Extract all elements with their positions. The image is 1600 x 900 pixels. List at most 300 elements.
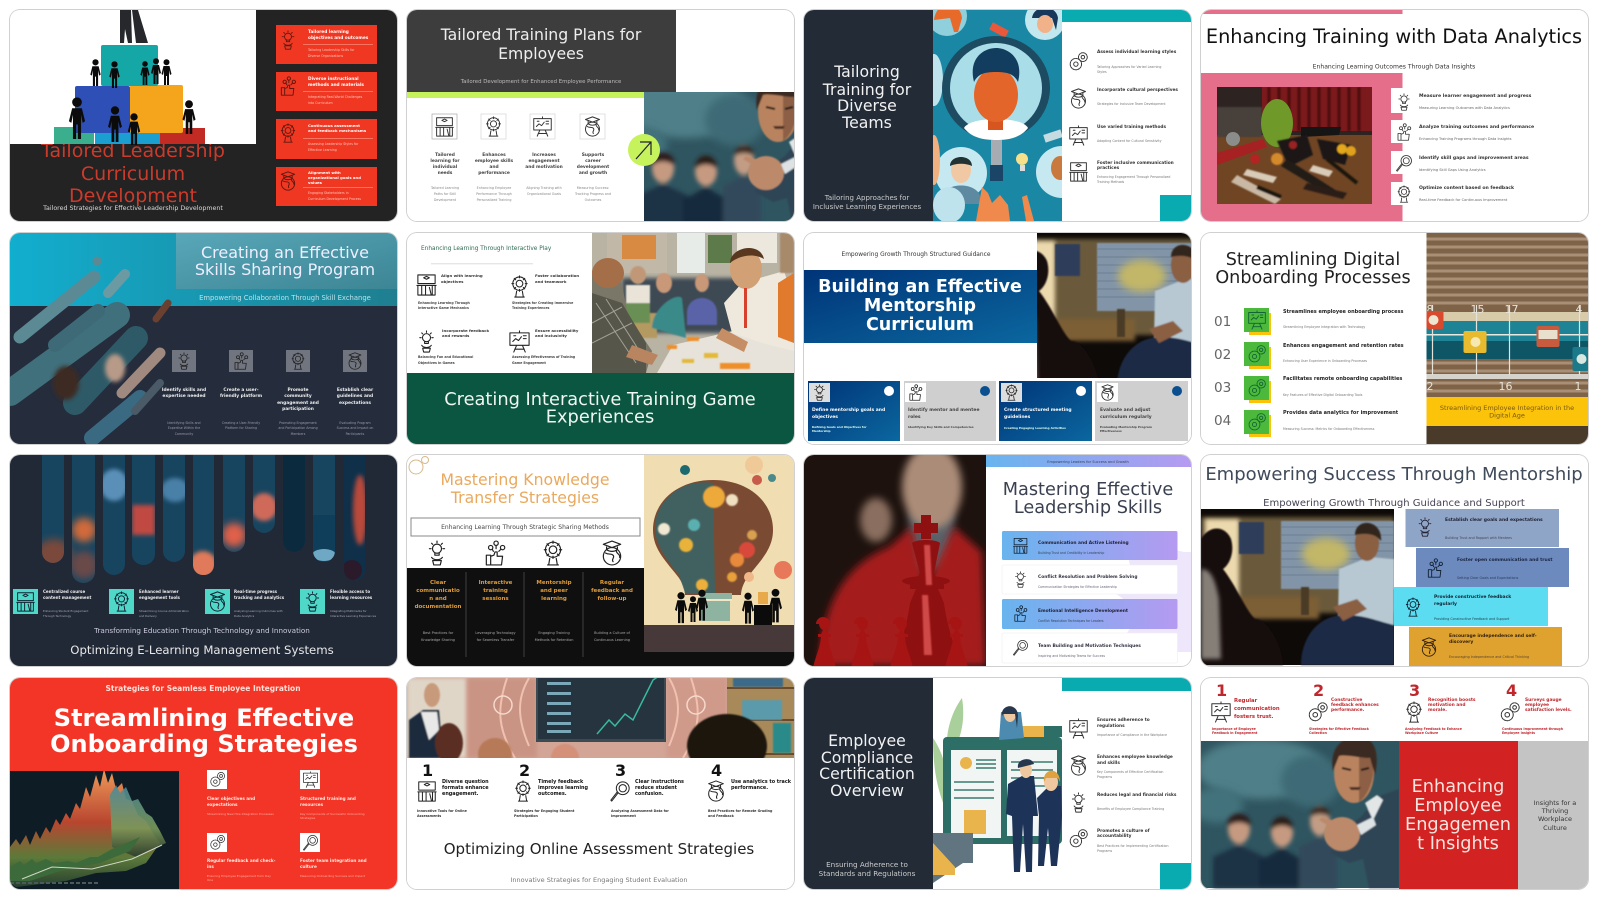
item 4: culture bbox=[300, 864, 317, 868]
item 3 bbox=[1070, 124, 1166, 145]
column 2: Participation bbox=[514, 814, 539, 818]
callout 2: into Curriculum bbox=[308, 101, 333, 105]
header band: Skills Sharing Program bbox=[195, 260, 375, 278]
item 3: tracking and analytics bbox=[234, 595, 285, 600]
insight 3: Workplace Culture bbox=[1405, 730, 1438, 734]
item 2: and Delivery bbox=[139, 614, 157, 618]
column headings: Clear bbox=[430, 580, 446, 586]
title bbox=[440, 470, 610, 507]
panel: Mastering Effective Leadership Skills bbox=[804, 455, 1191, 666]
item 4: Best Practices for Implementing Certification bbox=[1097, 844, 1169, 848]
item 3: Conflict Resolution Techniques for Leaders bbox=[1038, 619, 1104, 623]
title block: t Insights bbox=[1417, 834, 1499, 854]
step 1: Establish clear goals and expectations bbox=[1445, 517, 1543, 523]
panel: Enhancing Employee Engagement Insights bbox=[1201, 678, 1588, 888]
insight 1: communication bbox=[1234, 706, 1280, 712]
column headings: feedback and bbox=[591, 588, 633, 594]
item 3: Data Analytics bbox=[234, 614, 255, 618]
sidebar with title: Overview bbox=[830, 780, 904, 800]
accent bars bbox=[1201, 10, 1402, 221]
column 1: Tailored Learning bbox=[430, 186, 459, 190]
column 2: Enhances bbox=[482, 152, 506, 158]
title banner bbox=[407, 10, 676, 92]
title: Optimizing E-Learning Management Systems bbox=[70, 643, 334, 657]
column 1 bbox=[430, 114, 460, 202]
column 1: needs bbox=[438, 170, 453, 176]
callout 2: methods and materials bbox=[308, 82, 364, 88]
insight 3: 3 bbox=[1409, 680, 1420, 700]
item 1: Importance of Compliance in the Workplace bbox=[1097, 732, 1167, 736]
column headings: n and bbox=[429, 596, 447, 602]
icon row bbox=[429, 541, 621, 565]
sidebar with title: Ensuring Adherence to bbox=[826, 860, 908, 868]
step 03: Facilitates remote onboarding capabilities bbox=[1283, 376, 1402, 382]
item 2 bbox=[1072, 754, 1173, 778]
item 3 bbox=[1391, 151, 1529, 174]
item 4: Promotes a culture of bbox=[1097, 828, 1150, 834]
title block: Enhancing bbox=[1412, 776, 1504, 796]
decorative bubbles bbox=[409, 456, 428, 474]
column headings: Regular bbox=[600, 580, 624, 586]
step 2 bbox=[1416, 548, 1569, 587]
title band: Mentorship bbox=[864, 296, 976, 316]
photo: timeline board: 15 bbox=[1470, 302, 1484, 316]
column 2: Platform for Sharing bbox=[225, 426, 257, 430]
illustration: magnifier over diverse faces bbox=[933, 10, 1062, 221]
column 2: performance bbox=[478, 170, 510, 176]
card 1 bbox=[808, 380, 900, 440]
step 04: 04 bbox=[1214, 412, 1231, 428]
insight 1: Feedback in Engagement bbox=[1212, 730, 1258, 734]
item 1: Ensures adherence to bbox=[1097, 716, 1150, 722]
column 2: Creating a User-Friendly bbox=[222, 420, 260, 424]
photo: classroom with analytics screen bbox=[407, 678, 794, 758]
callout 1: Tailored learning bbox=[308, 29, 349, 35]
item 2 bbox=[300, 770, 365, 820]
column headings: Interactive bbox=[479, 580, 513, 586]
column 1: expertise needed bbox=[162, 392, 206, 398]
item 3 bbox=[1002, 599, 1178, 629]
item 2: Strategies for Creating Immersive bbox=[512, 300, 573, 304]
top strip bbox=[986, 455, 1191, 467]
step 2: Setting Clear Goals and Expectations bbox=[1457, 576, 1519, 580]
card 1: objectives bbox=[812, 414, 838, 420]
item 4 bbox=[1070, 160, 1174, 184]
step 3: regularly bbox=[1434, 601, 1457, 607]
item 1: regulations bbox=[1097, 722, 1125, 728]
item 3: Incorporate feedback bbox=[442, 328, 489, 332]
column 2: 2 bbox=[519, 760, 530, 780]
decorative lavender shape bbox=[1111, 538, 1191, 652]
item 1: Enhancing Learning Through bbox=[418, 300, 470, 304]
item 2: and skills bbox=[1097, 760, 1120, 766]
title: Leadership Skills bbox=[1014, 498, 1162, 518]
insight 4 bbox=[1501, 680, 1572, 734]
item 3: Objectives in Games bbox=[418, 360, 455, 364]
subtitle: Enhancing Learning Through Interactive Play bbox=[421, 246, 552, 252]
item 1: Measure learner engagement and progress bbox=[1419, 93, 1532, 99]
item 2: Strategies bbox=[300, 816, 316, 820]
card 2: Identify mentor and mentee bbox=[908, 406, 980, 412]
item 2 bbox=[109, 589, 189, 618]
column 2: Create a user- bbox=[223, 386, 259, 392]
item 1: Clear objectives and bbox=[207, 796, 255, 800]
sidebar with title: Diverse bbox=[837, 96, 897, 115]
title: Mastering Effective bbox=[1003, 480, 1173, 500]
title banner: Tailored Training Plans for bbox=[440, 25, 642, 44]
column 3: Clear instructions bbox=[635, 778, 684, 784]
card 1: Define mentorship goals and bbox=[812, 406, 885, 412]
sidebar with title: Compliance bbox=[821, 748, 913, 766]
title band: Experiences bbox=[546, 406, 654, 427]
column notes bbox=[421, 631, 631, 642]
item 2: Programs bbox=[1097, 774, 1112, 778]
card 4: Evaluating Mentorship Program bbox=[1100, 424, 1152, 428]
black panel bbox=[407, 568, 794, 666]
photo: timeline board: 8 bbox=[1426, 302, 1434, 316]
item 4: Training Methods bbox=[1096, 180, 1125, 184]
column 3: and Participation Among bbox=[278, 426, 318, 430]
photo: timeline board: 4 bbox=[1576, 302, 1582, 316]
step 01: Streamlining Employee Integration with Technology bbox=[1283, 324, 1365, 328]
photo: timeline board bbox=[1426, 233, 1588, 444]
callout 4: values bbox=[308, 180, 323, 185]
column notes: Building a Culture of bbox=[594, 631, 631, 635]
card 4 bbox=[1095, 380, 1188, 440]
item 4: Flexible access to bbox=[330, 589, 370, 594]
title: Onboarding Processes bbox=[1215, 268, 1411, 288]
item 4: practices bbox=[1097, 165, 1120, 171]
item 3: Ensuring Employee Engagement from Day bbox=[207, 874, 271, 878]
item 4: and inclusivity bbox=[535, 332, 567, 338]
insight 4: Surveys gauge bbox=[1525, 696, 1562, 702]
column 1: individual bbox=[433, 164, 458, 170]
sidebar with title: Inclusive Learning Experiences bbox=[813, 203, 921, 211]
item 2: resources bbox=[300, 802, 324, 806]
item 4: Foster inclusive communication bbox=[1097, 160, 1174, 166]
step 4: Encourage independence and self- bbox=[1449, 633, 1537, 639]
insight 2: Collection bbox=[1309, 730, 1328, 734]
column 3: Aligning Training with bbox=[526, 186, 562, 190]
column 4 bbox=[708, 760, 792, 818]
column 4: Evaluating Program bbox=[339, 420, 371, 424]
photo: manager pointing bbox=[1201, 741, 1399, 889]
column 2: employee skills bbox=[475, 158, 513, 164]
image: data mountain landscape bbox=[10, 771, 179, 889]
column 2: and bbox=[489, 164, 499, 170]
title: Onboarding Strategies bbox=[50, 730, 358, 758]
column 1: Development bbox=[434, 198, 457, 202]
item 1: Assess individual learning styles bbox=[1097, 49, 1177, 55]
item 2 bbox=[1391, 120, 1534, 143]
column 4 bbox=[337, 350, 374, 436]
column 3: 3 bbox=[615, 760, 626, 780]
column 4: Best Practices for Remote Grading bbox=[708, 808, 773, 812]
column headings: training bbox=[483, 588, 508, 594]
column 4: Establish clear bbox=[337, 386, 374, 392]
column 3: confusion. bbox=[635, 790, 664, 796]
insight 3 bbox=[1405, 680, 1476, 734]
item 3: Emotional Intelligence Development bbox=[1038, 608, 1128, 614]
card 4: curriculum regularly bbox=[1100, 414, 1152, 420]
column 4: guidelines and bbox=[337, 392, 373, 398]
item 2: Structured training and bbox=[300, 796, 356, 800]
card 2: roles bbox=[908, 414, 921, 420]
subtitle: Innovative Strategies for Engaging Student Evaluation bbox=[510, 876, 688, 884]
column 2: friendly platform bbox=[220, 392, 262, 398]
illustration: compliance dashboard and staff bbox=[933, 698, 1062, 883]
item 1: Tailoring Approaches for Varied Learning bbox=[1096, 65, 1161, 69]
item 3: and rewards bbox=[442, 332, 470, 338]
title: Optimizing Online Assessment Strategies bbox=[444, 840, 754, 858]
column 1 bbox=[162, 350, 206, 436]
column 3 bbox=[611, 760, 684, 818]
tagline block: Culture bbox=[1543, 824, 1567, 832]
sidebar with title: Tailoring Approaches for bbox=[824, 194, 909, 202]
callout 3: Effective Learning bbox=[308, 148, 337, 152]
card 1: Defining Goals and Objectives for bbox=[812, 424, 867, 428]
photo: manager pointing bbox=[644, 92, 794, 221]
title banner: Employees bbox=[498, 44, 584, 63]
caption box bbox=[1426, 396, 1588, 426]
insight 4: 4 bbox=[1506, 680, 1517, 700]
item 1: Centralized course bbox=[43, 589, 85, 594]
subtitle box bbox=[411, 518, 640, 536]
panel: Optimizing Online Assessment Strategies bbox=[407, 678, 794, 888]
item 4: Real-time Feedback for Continuous Improvement bbox=[1419, 198, 1508, 202]
column 4: Participants bbox=[346, 432, 365, 436]
item 4: Integrating Multimedia for bbox=[330, 609, 367, 613]
title: Streamlining Digital bbox=[1226, 250, 1400, 270]
insight 1: fosters trust. bbox=[1234, 714, 1273, 720]
item 4 bbox=[510, 328, 579, 364]
item 4 bbox=[1391, 182, 1515, 205]
column 4 bbox=[574, 114, 611, 202]
title block: Engagemen bbox=[1405, 814, 1511, 834]
column notes: Best Practices for bbox=[423, 631, 454, 635]
item 4: Optimize content based on feedback bbox=[1419, 185, 1515, 191]
step 3: Provide constructive feedback bbox=[1434, 594, 1512, 600]
item 4 bbox=[300, 832, 367, 878]
photo: training tools on a floor bbox=[1217, 87, 1372, 204]
panel: Mastering Knowledge Transfer Strategies bbox=[407, 455, 794, 666]
item 2: Conflict Resolution and Problem Solving bbox=[1038, 574, 1137, 580]
column 3: engagement bbox=[528, 158, 560, 164]
sidebar with title: Employee bbox=[828, 730, 906, 750]
item 1 bbox=[13, 589, 91, 618]
item 4: learning resources bbox=[330, 595, 373, 600]
column 2: Enhancing Employee bbox=[477, 186, 511, 190]
title band: Curriculum bbox=[866, 314, 974, 334]
column notes: Continuous Learning bbox=[594, 638, 630, 642]
callout 2 bbox=[276, 72, 377, 111]
column 2: Performance Through bbox=[476, 192, 512, 196]
header band bbox=[10, 232, 397, 306]
item 2 bbox=[1002, 565, 1178, 594]
item 2: Communication Strategies for Effective Leadership bbox=[1038, 585, 1117, 589]
title block bbox=[1399, 740, 1518, 888]
panel: Tailoring Training for Diverse Teams bbox=[804, 10, 1191, 221]
item 4: Enhancing Engagement Through Personalized bbox=[1097, 175, 1170, 179]
callout 1: Tailoring Leadership Skills for bbox=[307, 48, 355, 52]
photo: teams playing a training game bbox=[592, 233, 794, 373]
column 3 bbox=[277, 350, 319, 436]
card 3: guidelines bbox=[1004, 414, 1031, 420]
illustration: pyramid of blocks with people bbox=[10, 10, 256, 145]
callout 3: and feedback mechanisms bbox=[308, 128, 367, 133]
step 04: Provides data analytics for improvement bbox=[1283, 410, 1399, 416]
title band bbox=[804, 270, 1037, 342]
panel: Building an Effective Mentorship Curriculum bbox=[804, 232, 1191, 444]
column 3: participation bbox=[282, 406, 314, 412]
title bbox=[50, 704, 358, 758]
insight 2: 2 bbox=[1313, 680, 1324, 700]
column 4: career bbox=[585, 158, 602, 164]
item 4: Foster team integration and bbox=[300, 858, 367, 862]
step 1 bbox=[1406, 509, 1559, 547]
card 4: Effectiveness bbox=[1100, 428, 1122, 432]
panel: Tailored Leadership Curriculum Development bbox=[10, 10, 397, 221]
item 3: Use varied training methods bbox=[1097, 124, 1166, 130]
column 4: Outcomes bbox=[585, 198, 602, 202]
column 1: 1 bbox=[422, 760, 433, 780]
photo: timeline board: 1 bbox=[1574, 380, 1582, 392]
column notes: Leveraging Technology bbox=[475, 631, 516, 635]
step 4: Encouraging Independence and Critical Thinking bbox=[1449, 655, 1529, 659]
sidebar with title bbox=[804, 10, 933, 221]
illustration: idea light bulb bbox=[644, 455, 794, 652]
callout 1: objectives and outcomes bbox=[308, 35, 369, 41]
column 4: Supports bbox=[582, 152, 605, 158]
panel: Empowering Success Through Mentorship bbox=[1201, 455, 1588, 666]
insight 2: Strategies for Effective Feedback bbox=[1309, 726, 1370, 730]
panel: Streamlining Effective Onboarding Strategies bbox=[10, 678, 397, 888]
item 1 bbox=[1070, 716, 1167, 738]
item 1: content management bbox=[43, 595, 91, 600]
panel: Streamlining Digital Onboarding Processes bbox=[1201, 232, 1588, 444]
step 02: Enhances engagement and retention rates bbox=[1283, 342, 1404, 348]
step 3: Providing Constructive Feedback and Support bbox=[1434, 617, 1510, 621]
column 3: Promote bbox=[287, 386, 309, 392]
callout 3: Assessing Leadership Styles for bbox=[308, 142, 359, 146]
item 2: Key Components of Effective Certification bbox=[1097, 770, 1163, 774]
column headings: learning bbox=[541, 596, 567, 602]
item 3 bbox=[205, 589, 285, 618]
item 4: Game Engagement bbox=[512, 360, 546, 364]
subtitle box: Enhancing Learning Through Strategic Sharing Methods bbox=[441, 524, 609, 531]
item 3: Real-time progress bbox=[234, 589, 278, 594]
column 4: Success and Impact on bbox=[337, 426, 373, 430]
subtitle: Enhancing Learning Outcomes Through Data Insights bbox=[1313, 64, 1475, 70]
column 1: Identify skills and bbox=[162, 386, 206, 392]
callout 3 bbox=[276, 119, 377, 159]
column 1: Paths for Skill bbox=[434, 192, 456, 196]
item 1: Measuring Learning Outcomes with Data Analytics bbox=[1419, 106, 1510, 110]
column 2 bbox=[514, 760, 589, 818]
panel: Employee Compliance Certification Overview bbox=[804, 678, 1191, 888]
tagline block: Insights for a bbox=[1534, 798, 1576, 806]
card 4: Evaluate and adjust bbox=[1100, 406, 1151, 412]
insight 4: Continuous Improvement through bbox=[1502, 726, 1564, 730]
insight 1: Importance of Employee bbox=[1212, 726, 1256, 730]
column 2: Timely feedback bbox=[538, 778, 584, 784]
step 02: 02 bbox=[1214, 346, 1231, 362]
photo: chess king before a leader bbox=[804, 455, 986, 666]
insight 1 bbox=[1212, 680, 1280, 734]
sidebar with title: Certification bbox=[819, 764, 915, 782]
item 1: Through Technology bbox=[42, 614, 72, 618]
item 4 bbox=[300, 589, 377, 618]
item 1 bbox=[1002, 531, 1178, 560]
column 1: Innovative Tools for Online bbox=[417, 808, 468, 812]
insight 1: Regular bbox=[1234, 698, 1258, 704]
column 3: Members bbox=[291, 432, 306, 436]
callout 2: Integrating Real-World Challenges bbox=[308, 95, 363, 99]
callout 1: Diverse Organizations bbox=[308, 54, 344, 58]
panel: Creating Interactive Training Game Experiences bbox=[407, 232, 794, 444]
item 1: objectives bbox=[441, 278, 464, 284]
callout 4 bbox=[276, 167, 377, 206]
item 2: Foster collaboration bbox=[535, 272, 579, 278]
item 3: Reduces legal and financial risks bbox=[1097, 792, 1177, 798]
column 4: performance. bbox=[731, 784, 768, 790]
panel: Creating an Effective Skills Sharing Program bbox=[10, 232, 397, 444]
slide title: Curriculum bbox=[81, 163, 185, 185]
callout 4: Curriculum Development Process bbox=[308, 197, 361, 201]
column headings: documentation bbox=[415, 604, 461, 610]
step 01: 01 bbox=[1214, 314, 1231, 330]
tagline block bbox=[1518, 740, 1588, 888]
insight 1: 1 bbox=[1216, 680, 1227, 700]
item 4: Inspiring and Motivating Teams for Success bbox=[1038, 654, 1105, 658]
card 2 bbox=[904, 380, 996, 440]
photo: diagonal strips of people bbox=[10, 260, 168, 438]
item 1: Interactive Game Mechanics bbox=[418, 306, 469, 310]
header band: Empowering Collaboration Through Skill Exchange bbox=[199, 294, 371, 302]
item 3: Analyzing Learning Outcomes with bbox=[234, 609, 283, 613]
column 2 bbox=[220, 350, 262, 430]
column 2: improves learning bbox=[538, 784, 589, 790]
slide title: Development bbox=[69, 185, 197, 207]
insight 4: satisfaction levels. bbox=[1525, 706, 1572, 712]
accent blocks bbox=[1062, 678, 1191, 888]
step 02 bbox=[1214, 342, 1404, 368]
card 3: Creating Engaging Learning Activities bbox=[1004, 426, 1066, 430]
item 2: Enhanced learner bbox=[139, 589, 179, 594]
item 1 bbox=[417, 272, 483, 310]
insight 2: performance. bbox=[1331, 706, 1365, 712]
column 1: Identifying Skills and bbox=[167, 420, 201, 424]
tagline block: Thriving bbox=[1541, 806, 1568, 814]
item 1: Streamlining New Hire Integration Processes bbox=[207, 812, 274, 816]
title: Mastering Knowledge bbox=[440, 470, 610, 489]
accent bar bbox=[407, 92, 644, 98]
column 3: reduce student bbox=[635, 784, 678, 790]
column 3: engagement and bbox=[277, 400, 319, 406]
panel: Tailored Training Plans for Employees bbox=[407, 10, 794, 221]
item 3 bbox=[207, 832, 276, 882]
caption box: Digital Age bbox=[1489, 411, 1525, 419]
insight 4: Employee Insights bbox=[1502, 730, 1535, 734]
item 2: Enhancing Training Programs through Data Insights bbox=[1419, 137, 1512, 141]
tagline block: Workplace bbox=[1538, 814, 1572, 822]
column 1: Expertise Within the bbox=[168, 426, 200, 430]
sidebar with title: Teams bbox=[841, 113, 892, 132]
item 4: Team Building and Motivation Techniques bbox=[1038, 643, 1141, 649]
column 3 bbox=[525, 114, 563, 196]
item 1 bbox=[1391, 88, 1532, 113]
photo: timeline board: 16 bbox=[1498, 380, 1512, 392]
